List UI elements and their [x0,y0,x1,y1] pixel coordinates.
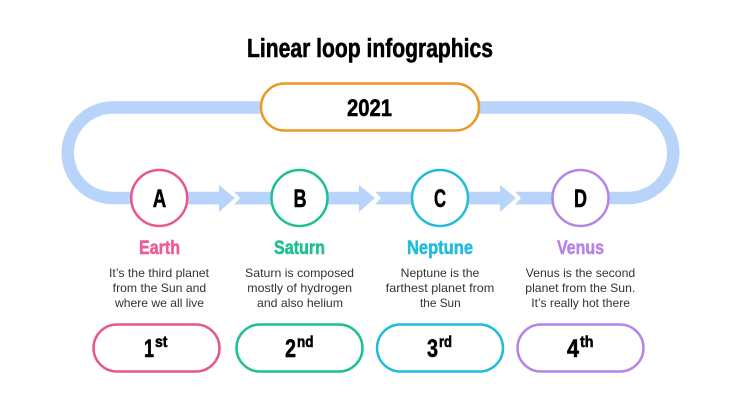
rank pill: 3rd: 3 [427,335,438,363]
rank pill: 3rd [377,324,503,372]
heading: Saturn: Saturn [274,237,325,259]
text: Earth description: It’s the third planet [109,266,210,280]
text: Neptune description: the Sun [420,296,461,310]
rank pill: 1st: st [155,334,168,351]
arrow: A to B [186,185,235,212]
title: Linear loop infographics [247,35,493,63]
heading: Venus: Venus [557,237,604,259]
rank pill: 4th: 4 [567,335,579,363]
text: Neptune description: farthest planet from [386,281,494,295]
text: Earth description: where we all live [114,296,204,310]
text: Saturn description: Saturn is composed [245,266,354,280]
text: Venus description: It’s really hot there [531,296,630,310]
arrow: B to C [234,185,375,212]
node B: B [294,185,306,213]
text: Saturn description [245,266,354,310]
rank pill: 2nd: 2 [285,335,296,363]
rank pill: 4th [518,324,644,372]
text: Saturn description: and also helium [257,296,343,310]
text: Venus description: Venus is the second [526,266,635,280]
rank pill: 3rd: rd [439,334,452,351]
rank pill: 4th: th [580,334,594,351]
year pill: 2021 [347,95,392,122]
arrow: C to D [375,185,516,212]
node C [412,170,468,226]
loop band [68,108,673,198]
node D: D [574,185,587,213]
text: Earth description: from the Sun and [113,281,206,295]
heading: Neptune: Neptune [407,237,473,259]
node B [272,170,328,226]
node D [552,170,608,226]
rank pill: 1st [94,324,220,372]
rank pill: 2nd: nd [297,334,314,351]
node A [131,170,187,226]
text: Venus description: planet from the Sun. [525,281,635,295]
text: Earth description [109,266,210,310]
node A: A [153,185,166,213]
year pill [261,84,479,130]
rank pill: 1st: 1 [144,335,154,363]
text: Venus description [525,266,635,310]
heading: Earth: Earth [139,237,180,259]
node C: C [434,185,446,213]
rank pill: 2nd [236,324,362,372]
text: Neptune description: Neptune is the [401,266,480,280]
arrow: into D [515,192,572,204]
text: Saturn description: mostly of hydrogen [247,281,352,295]
text: Neptune description [386,266,494,310]
